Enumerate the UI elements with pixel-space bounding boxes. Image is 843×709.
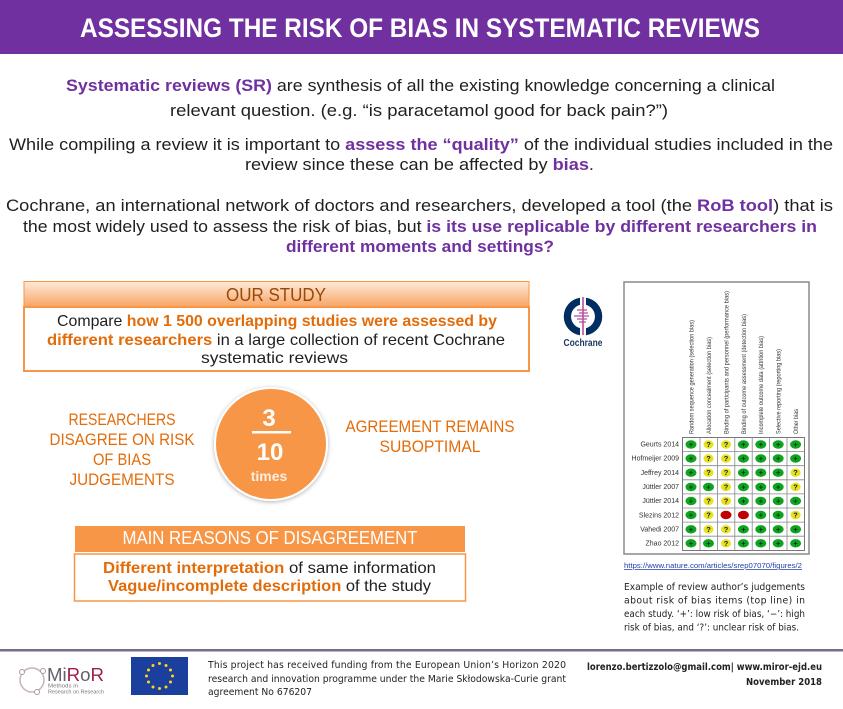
chart judgement symbols: + xyxy=(776,539,781,548)
contact details: lorenzo.bertizzolo@gmail.com| www.miror-ejd.eu xyxy=(587,662,822,673)
intro text: RoB tool: Cochrane, an international network of doctors and researchers, developed a tool (the RoB tool ) that is xyxy=(6,196,833,215)
chart judgement symbols: + xyxy=(741,482,746,492)
callout: researchers disagree: OF BIAS xyxy=(93,450,151,469)
funding statement: This project has received funding from the European Union’s Horizon 2020 xyxy=(207,660,566,671)
intro text: systematic reviews definition: relevant question. (e.g. “is paracetamol good for back pain?”) xyxy=(170,101,668,120)
chart judgement dots xyxy=(686,440,801,548)
chart column headers: Random sequence generation (selection bias) xyxy=(688,320,696,434)
stat circle: 3 in 10 times xyxy=(214,387,328,501)
chart judgement symbols: ? xyxy=(724,496,729,506)
footer divider xyxy=(0,649,843,652)
our study text xyxy=(24,307,529,371)
chart column headers: Selective reporting (reporting bias) xyxy=(776,349,782,434)
intro text: systematic reviews definition xyxy=(66,76,775,120)
our study text: different researchers in a large collection of recent Cochrane xyxy=(47,332,505,349)
intro text: RoB tool: different moments and settings? xyxy=(286,237,554,256)
chart judgement symbols: ? xyxy=(706,468,711,477)
chart column headers xyxy=(688,291,800,434)
stat circle: 3 in 10 times: times xyxy=(251,468,287,484)
chart column headers: Other bias xyxy=(793,408,800,434)
chart judgement symbols: + xyxy=(689,496,694,506)
contact details xyxy=(587,662,822,688)
stat circle: 3 in 10 times: 3 xyxy=(262,405,276,432)
callout: researchers disagree xyxy=(50,410,195,489)
chart column headers: Binding of participants and personnel (performance bias) xyxy=(724,291,730,434)
chart judgement symbols xyxy=(689,440,798,548)
chart column headers: Allocation concealment (selection bias) xyxy=(706,337,713,434)
title banner: ASSESSING THE RISK OF BIAS IN SYSTEMATIC REVIEWS xyxy=(80,13,760,43)
callout: researchers disagree: JUDGEMENTS xyxy=(70,470,174,489)
intro text: assessing quality: review since these can be affected by bias. xyxy=(245,155,594,174)
chart judgement symbols: + xyxy=(759,482,764,492)
icon: EU flag xyxy=(131,657,188,695)
chart judgement symbols: + xyxy=(759,468,764,477)
chart caption: Example of review author’s judgements xyxy=(624,582,805,593)
chart judgement symbols: + xyxy=(706,482,711,492)
callout: agreement remains suboptimal: AGREEMENT REMAINS xyxy=(346,417,514,436)
chart judgement symbols: + xyxy=(706,539,711,548)
our study text: Compare how 1 500 overlapping studies were assessed by xyxy=(57,313,497,330)
chart judgement symbols: + xyxy=(793,454,798,463)
chart judgement symbols: + xyxy=(741,525,746,534)
source link: https://www.nature.com/articles/srep07070/figures/2 xyxy=(624,561,802,570)
chart judgement symbols: ? xyxy=(793,510,798,520)
chart judgement symbols: + xyxy=(759,454,764,463)
chart judgement symbols: + xyxy=(776,496,781,506)
icon: MiRoR logo: MiRoR xyxy=(47,665,104,685)
panel: our study xyxy=(24,282,529,371)
main reasons text xyxy=(74,554,466,601)
chart judgement symbols: + xyxy=(689,525,694,534)
chart judgement symbols: + xyxy=(759,496,764,506)
chart column headers: Incomplete outcome data (attrition bias) xyxy=(758,336,765,434)
intro text: RoB tool: the most widely used to assess the risk of bias, but is its use replicable by different researchers in xyxy=(23,217,817,236)
callout: agreement remains suboptimal xyxy=(346,417,514,456)
chart judgement symbols: + xyxy=(741,468,746,477)
chart judgement symbols: + xyxy=(776,482,781,492)
our study heading xyxy=(24,282,529,306)
chart study labels: Jüttler 2014 xyxy=(642,498,679,505)
chart judgement symbols: + xyxy=(759,525,764,534)
main reasons text: Vague/incomplete description of the study xyxy=(108,578,431,595)
our study heading: OUR STUDY xyxy=(226,285,326,305)
chart judgement symbols: + xyxy=(689,482,694,492)
chart study labels: Slezins 2012 xyxy=(639,512,679,520)
main reasons text: Different interpretation of same information xyxy=(103,560,436,577)
chart study labels: Hofmeijer 2009 xyxy=(632,456,679,462)
chart caption: risk of bias, and ‘?’: unclear risk of bias. xyxy=(624,622,799,634)
chart judgement symbols: ? xyxy=(706,496,711,506)
chart judgement symbols: ? xyxy=(706,525,711,534)
chart column headers: Binding of outcome assessment (detection bias) xyxy=(741,314,748,434)
icon: MiRoR logo: Research on Research xyxy=(48,690,104,696)
chart judgement symbols: ? xyxy=(706,454,711,463)
chart: risk of bias table xyxy=(624,282,809,554)
title banner xyxy=(0,0,843,54)
chart judgement symbols: + xyxy=(793,440,798,449)
chart judgement symbols: + xyxy=(759,539,764,548)
contact details: November 2018 xyxy=(746,677,822,688)
chart judgement symbols: ? xyxy=(706,510,711,520)
chart judgement symbols: + xyxy=(776,454,781,463)
chart judgement symbols: + xyxy=(689,468,694,477)
intro text: systematic reviews definition: Systematic reviews (SR) are synthesis of all the existing knowledge concerning a clinical xyxy=(66,76,775,95)
chart study labels: Zhao 2012 xyxy=(646,540,679,548)
chart judgement symbols: ? xyxy=(793,482,798,492)
chart judgement symbols: + xyxy=(741,440,746,449)
icon: cochrane logo: Cochrane xyxy=(564,337,603,349)
intro text: assessing quality: While compiling a review it is important to assess the “quality” of the individual studies included in the xyxy=(9,135,833,154)
icon: MiRoR logo xyxy=(20,665,104,696)
chart judgement symbols: ? xyxy=(724,482,729,492)
chart study labels: Geurts 2014 xyxy=(640,442,679,448)
chart judgement symbols: ? xyxy=(724,539,729,548)
callout: agreement remains suboptimal: SUBOPTIMAL xyxy=(380,437,480,456)
chart judgement symbols: ? xyxy=(706,440,711,449)
funding statement: research and innovation programme under the Marie Skłodowska-Curie grant xyxy=(208,674,566,685)
chart study labels xyxy=(632,442,679,548)
chart judgement symbols: + xyxy=(689,454,694,463)
chart study labels: Vahedi 2007 xyxy=(640,526,679,534)
chart judgement symbols: + xyxy=(689,539,694,548)
icon: cochrane logo xyxy=(564,297,603,349)
chart judgement symbols: ? xyxy=(724,525,729,534)
chart judgement symbols: ? xyxy=(724,454,729,463)
chart judgement symbols: + xyxy=(689,440,694,449)
stat circle: 3 in 10 times: 10 xyxy=(257,439,283,466)
chart judgement symbols: + xyxy=(741,539,746,548)
chart judgement symbols: + xyxy=(741,454,746,463)
chart judgement symbols: + xyxy=(759,510,764,520)
funding statement: agreement No 676207 xyxy=(208,687,312,698)
chart judgement symbols: + xyxy=(741,496,746,506)
chart judgement symbols: + xyxy=(793,525,798,534)
our study text: systematic reviews xyxy=(201,350,348,367)
chart judgement symbols: ? xyxy=(724,468,729,477)
intro text: assessing quality xyxy=(9,135,833,174)
callout: researchers disagree: DISAGREE ON RISK xyxy=(50,430,195,449)
chart caption: about risk of bias items (top line) in xyxy=(624,596,805,606)
chart judgement symbols: ? xyxy=(724,440,729,449)
chart judgement symbols: + xyxy=(689,510,694,520)
chart judgement symbols: + xyxy=(776,468,781,477)
chart judgement symbols: + xyxy=(776,440,781,449)
funding statement xyxy=(207,660,566,698)
chart judgement symbols: + xyxy=(776,510,781,520)
chart caption: each study. ‘+’: low risk of bias, ‘−’: high xyxy=(624,609,805,620)
chart study labels: Jüttler 2007 xyxy=(642,484,679,491)
chart study labels: Jeffrey 2014 xyxy=(641,470,679,477)
intro text: RoB tool xyxy=(6,196,833,256)
main reasons heading xyxy=(75,526,465,552)
icon: MiRoR logo: Methods in xyxy=(48,684,78,690)
main reasons heading: MAIN REASONS OF DISAGREEMENT xyxy=(122,528,418,548)
callout: researchers disagree: RESEARCHERS xyxy=(68,410,176,429)
chart judgement symbols: + xyxy=(776,525,781,534)
chart grid xyxy=(682,438,804,550)
chart judgement symbols: ? xyxy=(793,468,798,477)
panel: main reasons of disagreement xyxy=(74,526,466,601)
chart judgement symbols: + xyxy=(759,440,764,449)
chart judgement symbols: + xyxy=(793,496,798,506)
chart caption xyxy=(624,582,805,634)
chart judgement symbols: + xyxy=(793,539,798,548)
